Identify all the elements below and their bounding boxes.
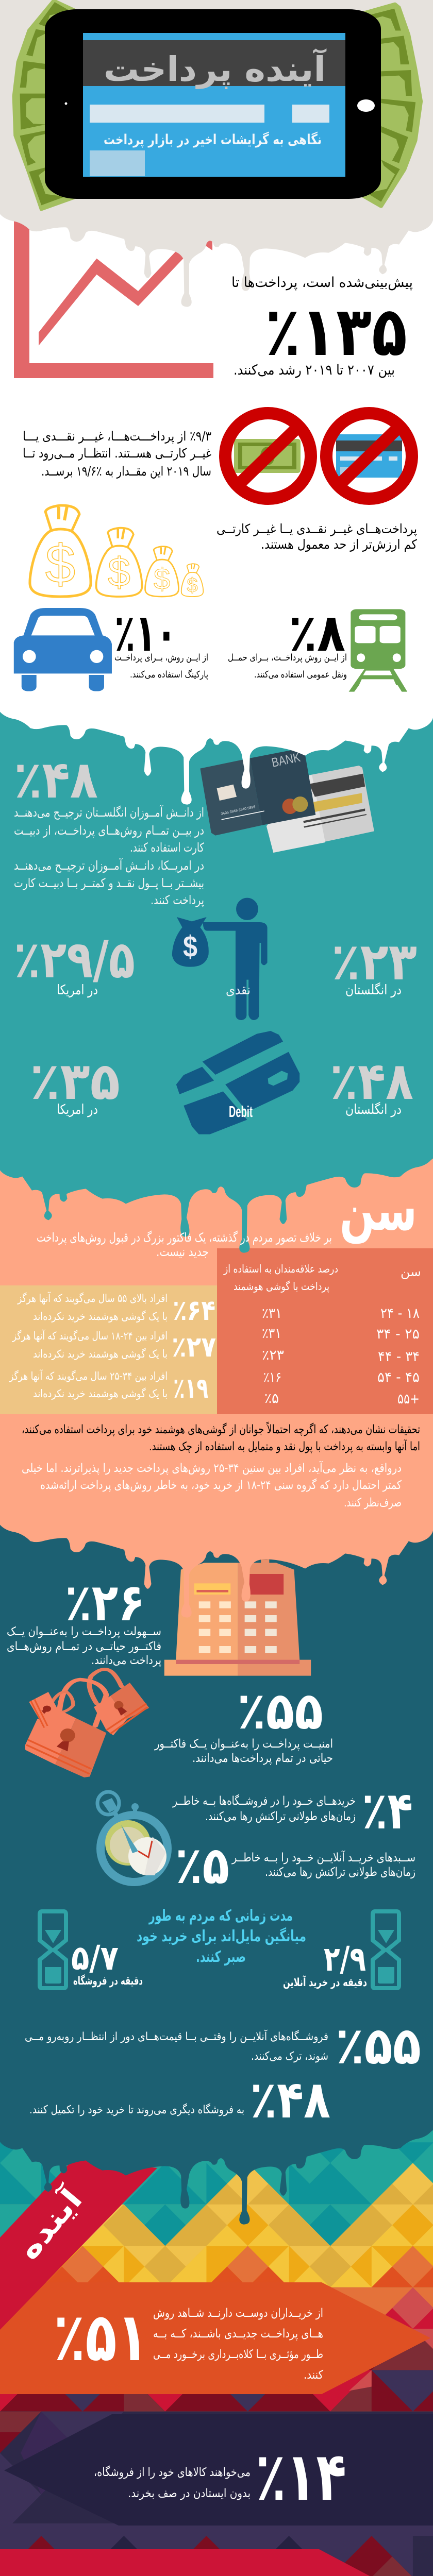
icon: money bags: $ [45,534,75,595]
tablet screen [83,33,345,177]
stat: cash UK: ٪۲۳ [331,931,417,992]
stat list: never bought with smartphone: افراد بین ۳۴-۲۵ سال می‌گویند که آنها هرگز [9,1369,168,1382]
stat: minutes in store: دقیقه در فروشگاه [73,1974,143,1988]
panel: crimson 10 percent arrow [0,2549,425,2576]
stat: cash US: در امریکا [57,982,98,998]
text: age group note: صرف‌نظر کنند. [344,1496,402,1510]
stat: 8 percent transit: ٪۸ [289,603,345,663]
stat: minutes online [283,1939,367,1989]
stat: 5 percent abandon online: ٪۵ [175,1835,229,1895]
stat: 26 percent convenience: فاکتــور حیاتــی در تمــام روش‌هــای [7,1640,161,1653]
icon: bank card: 3495 3849 3840 5896 [221,805,256,816]
stat: 51 percent: ٪۵۱ [54,2298,148,2376]
table: smartphone payment interest by age: ٪۳۱ [262,1326,281,1342]
stat list: never bought with smartphone: با یک گوشی هوشمند خرید نکرده‌اند [33,1348,168,1360]
icon: hourglass left [40,1911,66,1988]
stat: 8 percent transit: از ایــن روش پرداخــت، بــرای حمــل [228,652,347,663]
stat: 14 percent: می‌خواهند کالاهای خود را از فروشگاه، [94,2465,251,2479]
drip: teal edge [0,1154,433,1253]
stat list: never bought with smartphone: ٪۱۹ [173,1371,208,1404]
stat: 4 percent abandon in store: خریدهــای خــود را در فروشــگاه‌ها بــه خاطــر [172,1794,356,1808]
icon: money bags [30,505,203,597]
title: آینده پرداخت [104,48,326,89]
stat: debit UK: در انگلستان [345,1101,402,1117]
heading: waiting time: میانگین مایل‌اند برای خرید خود [137,1927,306,1945]
stat: minutes in store [71,1938,143,1988]
home button [357,99,375,112]
table: smartphone payment interest by age: سن [401,1265,421,1279]
stat: 8 percent transit: ونقل عمومی استفاده می‌کنند. [254,669,347,680]
panel: convenience dark teal background [0,1520,433,2128]
panel: students teal background [0,708,433,1157]
stat: 48 percent go elsewhere [29,2070,330,2130]
stat list: never bought with smartphone [9,1292,216,1404]
panel: orange 51 percent arrow [0,2282,430,2394]
table: smartphone payment interest by age: ٪۱۶ [263,1369,281,1385]
stat: 10 percent parking: ٪۱۰ [114,603,177,663]
stat list: never bought with smartphone: افراد بالای ۵۵ سال می‌گویند که آنها هرگز [17,1292,168,1304]
panel: header background [0,0,433,211]
screen bar long [90,105,264,123]
stat: cash US: ٪۲۹/۵ [14,929,135,990]
stat: 4 percent abandon in store [172,1781,413,1841]
drip: beige header edge [0,208,433,307]
icon: bank card: BANK [270,750,302,770]
table: smartphone payment interest by age: ۴۵ - ۵۴ [377,1369,420,1385]
text: non-cash less valuable [216,521,417,552]
camera [65,102,67,105]
icon: banknotes fan [14,0,421,210]
text: students preferences: کارت استفاده کنند. [130,840,204,855]
icon: padlocks [25,1669,149,1777]
stat: debit UK: ٪۴۸ [330,1051,413,1111]
text: 9.3 percent non-cash: ٪۹/۳ از پرداخـــت‌هـــا، غیـــر نقـــدی یـــا [23,429,211,444]
text: students preferences: در امریــکا، دانــش آمــوزان ترجیــح می‌دهنــد [14,858,204,873]
table: smartphone payment interest by age: درصد علاقه‌مندان به استفاده از [223,1263,338,1275]
label: debit: Debit [229,1103,253,1121]
icon: car [14,608,112,691]
table: smartphone payment interest by age: ٪۲۳ [262,1347,284,1363]
icon: tablet [45,9,381,199]
stat: 4 percent abandon in store: ٪۴ [362,1781,413,1841]
label: cash: نقدی [226,982,251,998]
panel: age table background [217,1248,433,1414]
text: age intro: جدید نیست. [156,1245,209,1259]
text: forecast 135 percent: پیش‌بینی‌شده است، پرداخت‌ها تا [231,275,413,291]
stat: 26 percent convenience [7,1572,161,1667]
drip: white edge [0,706,433,805]
stat: 26 percent convenience: ٪۲۶ [65,1572,145,1633]
stat: 48 percent go elsewhere: به فروشگاه دیگری می‌روند تا خرید خود را تکمیل کنند. [29,2103,244,2116]
table: smartphone payment interest by age: ۲۵ - ۳۴ [376,1326,420,1342]
table: smartphone payment interest by age: +۵۵ [397,1391,420,1407]
stat: 10 percent parking: از ایــن روش، بــرای پرداخــت [114,652,208,663]
icon: person with money bag [172,898,268,1020]
text: research note [22,1422,420,1453]
table: smartphone payment interest by age: ۱۸ - ۲۴ [380,1306,420,1321]
text: 9.3 percent non-cash [23,429,211,479]
text: age group note: درواقع، به نظر می‌آید، افراد بین سنین ۳۴-۲۵ روش‌های پرداخت جدید را پذیراترند. اما خیلی [22,1461,402,1475]
icon: stopwatch [97,1792,168,1882]
stat list: never bought with smartphone: افراد بین ۲۴-۱۸ سال می‌گویند که آنها هرگز [12,1329,168,1342]
text: age group note [22,1461,402,1510]
table: smartphone payment interest by age: ٪۳۱ [262,1306,282,1321]
heading: waiting time [137,1907,306,1966]
stat: 55 percent leave online stores: فروشــگاه‌های آنلایــن را وقتــی بــا قیمت‌هــای دور از انتظــار روبه‌رو مــی [25,2029,328,2043]
stat: 5 percent abandon online [175,1835,415,1895]
text: students preferences: پرداخت کنند. [151,893,204,907]
stat: 55 percent leave online stores: ٪۵۵ [336,2015,421,2076]
screen block [90,150,145,176]
panel: dark 14 percent arrow [4,2414,433,2526]
stat: 55 percent security [154,1681,333,1765]
stat: 14 percent [94,2437,346,2516]
stat: 14 percent: بدون ایستادن در صف بخرند. [128,2487,251,2500]
stat: minutes in store: ۵/۷ [71,1938,119,1978]
text: students preferences: در بیــن تمــام روش‌هــای پرداخــت، از دبیــت [14,823,204,838]
table: smartphone payment interest by age [223,1263,421,1407]
stat: 51 percent: از خریــداران دوســت دارنــد شــاهد روش [153,2307,323,2320]
text: students preferences [14,805,204,907]
stat: 55 percent leave online stores [25,2015,421,2076]
stat: 48 percent go elsewhere: ٪۴۸ [250,2070,330,2130]
panel: future banner [0,2159,157,2330]
text: students preferences: از دانــش آمــوزان انگلســتان ترجیــح می‌دهنــد [14,805,204,820]
title band [83,40,345,86]
stat: 26 percent convenience: پرداخت می‌دانند. [91,1654,161,1667]
icon: person with money bag: $ [183,930,197,963]
drip: dark teal edge [0,2126,433,2225]
icon: cash register [164,1560,311,1676]
stat: 10 percent parking: پارکینگ استفاده می‌کنند. [130,669,208,680]
icon: debit card [176,1031,299,1134]
stat: 51 percent: هــای پرداخــت جدیــدی باشــند، کــه بــه [153,2327,323,2341]
panel: smartphone stats background [0,1285,217,1414]
stat: minutes online: ۲/۹ [324,1939,366,1979]
stat: 48 percent students: ٪۴۸ [14,750,98,810]
chart: growth line [14,212,213,378]
stat: minutes online: دقیقه در خرید آنلاین [283,1975,367,1989]
icon: hourglass right [373,1911,399,1988]
icon: no cash [225,413,311,499]
heading: waiting time: صبر کنند. [196,1948,246,1966]
stat: debit US: ٪۳۵ [30,1051,120,1111]
text: age group note: کمتر احتمال دارد که گروه سنی ۲۴-۱۸ از خرید خود، به خاطر روش‌های پرداخت ارائه‌شده [40,1478,402,1492]
text: 9.3 percent non-cash: غیــر کارتــی هســتند. انتظــار مــی‌رود تــا [23,446,211,461]
screen bar short [292,105,329,123]
table: smartphone payment interest by age: ۳۴ - ۴۴ [378,1349,420,1365]
drip: salmon edge [0,1519,433,1618]
stat: 51 percent [54,2298,323,2382]
stat list: never bought with smartphone: ٪۶۴ [173,1294,215,1327]
text: forecast 135 percent: ٪۱۳۵ [265,292,407,371]
stat: 14 percent: ٪۱۴ [256,2437,346,2516]
text: age intro [37,1230,332,1259]
stat: 51 percent: طــور مؤثــری بــا کلاه‌بــرداری برخــورد مــی [153,2348,323,2361]
text: non-cash less valuable: کم ارزش‌تر از حد معمول هستند. [261,537,417,552]
stat list: never bought with smartphone: ٪۲۷ [172,1330,216,1363]
panel: age salmon background [0,1155,433,1522]
stat: 26 percent convenience: ســهولت پرداخــت را به‌عنــوان یــک [7,1625,161,1638]
stat: debit US: در امریکا [57,1102,98,1117]
stat list: never bought with smartphone: با یک گوشی هوشمند خرید نکرده‌اند [33,1387,168,1400]
text: forecast 135 percent: بین ۲۰۰۷ تا ۲۰۱۹ رشد می‌کنند. [234,362,395,378]
heading: waiting time: مدت زمانی که مردم به طور [148,1907,293,1925]
stat: 8 percent transit [228,603,347,680]
stat: 55 percent security: حیاتی در تمام پرداخت‌ها می‌دانند. [192,1752,333,1765]
stat: 51 percent: کنند. [304,2368,323,2382]
heading: future: آینده [10,2180,90,2266]
text: forecast 135 percent [231,275,413,378]
stat list: never bought with smartphone: با یک گوشی هوشمند خرید نکرده‌اند [33,1310,168,1323]
icon: money bags: $ [154,563,170,596]
stat: 55 percent security: امنیــت پرداخــت را به‌عنــوان یــک فاکتــور [154,1737,333,1751]
stat: 55 percent security: ٪۵۵ [237,1681,323,1741]
stat: 55 percent leave online stores: شوند، ترک می‌کنند. [251,2050,328,2063]
icon: bank card [200,750,374,853]
stat: 4 percent abandon in store: زمان‌های طولانی تراکنش رها می‌کنند. [205,1810,356,1823]
stat: cash UK: در انگلستان [345,982,402,998]
subtitle: نگاهی به گرایشات اخیر در بازار پرداخت [104,131,322,148]
icon: train [349,609,407,692]
icon: no card [326,413,412,499]
text: age intro: بر خلاف تصور مردم در گذشته، یک فاکتور بزرگ در قبول روش‌های پرداخت [37,1230,332,1245]
section background: white [0,0,433,1030]
text: students preferences: بیشــتر بــا پــول نقــد و کمتــر بــا دبیــت کارت [14,876,204,890]
icon: money bags: $ [187,574,198,596]
text: 9.3 percent non-cash: سال ۲۰۱۹ این مقــدار به ٪۱۹/۶ برســد. [41,464,211,479]
table: smartphone payment interest by age: پرداخت با گوشی هوشمند [234,1280,329,1293]
panel: triangle pattern background [0,2127,433,2576]
icon: money bags: $ [108,549,130,595]
table: smartphone payment interest by age: ٪۵ [264,1391,279,1406]
